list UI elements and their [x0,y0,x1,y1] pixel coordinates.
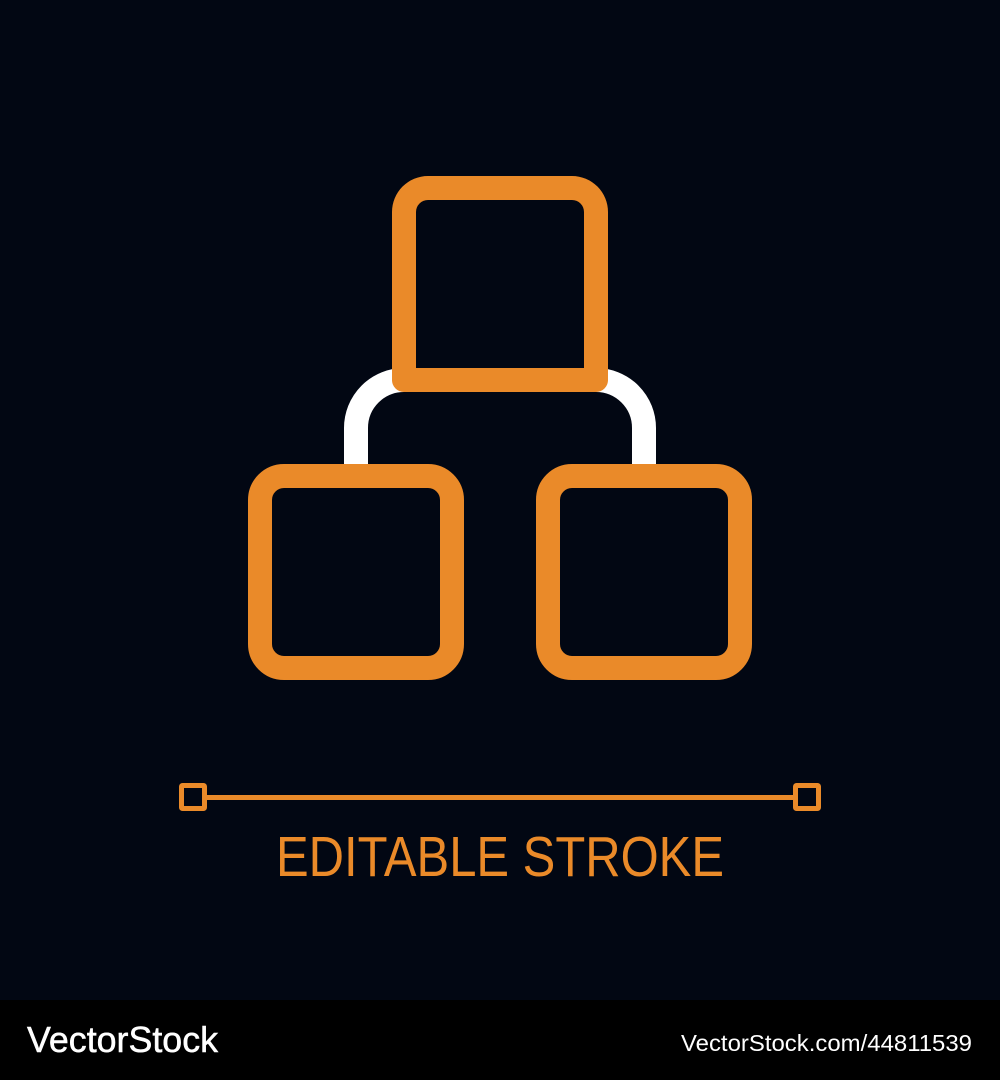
brand name: VectorStock [27,1019,219,1060]
editable stroke indicator line with handles [182,786,818,808]
image reference url: VectorStock.com/44811539 [681,1030,972,1056]
caption: editable stroke: EDITABLE STROKE [276,825,724,889]
connector: white rounded bracket [356,380,644,470]
icon: hierarchy of three squares [260,176,740,668]
top square [392,176,608,392]
bottom right square [548,476,740,668]
bottom left square [260,476,452,668]
watermark footer bar [0,1000,1000,1080]
